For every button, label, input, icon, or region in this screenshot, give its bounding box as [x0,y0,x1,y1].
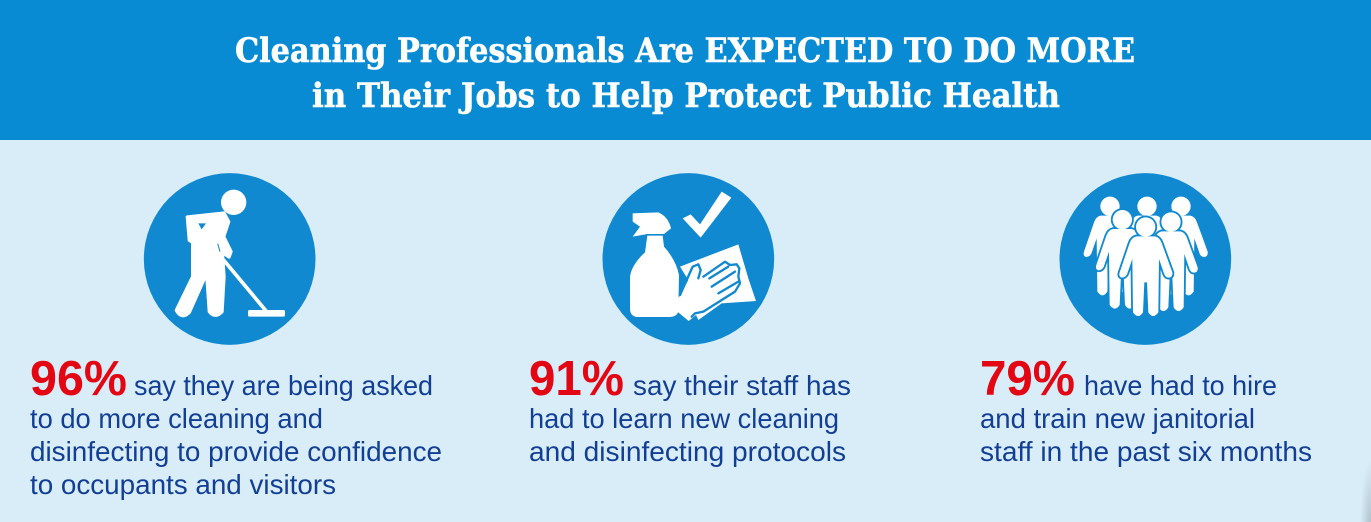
title [235,31,1135,116]
statistic text: say they are being asked [134,370,433,401]
statistic text [980,352,1312,467]
icon: person mopping [144,173,315,345]
icon: group of people [1059,173,1231,345]
statistic text [30,352,442,500]
statistic text: staff in the past six months [980,436,1312,467]
statistic text: say their staff has [633,370,851,401]
title: Cleaning Professionals Are EXPECTED TO DO MORE [235,31,1135,71]
statistic text: and disinfecting protocols [529,436,846,467]
panel: 79% hire and train [980,173,1312,467]
statistic text: to do more cleaning and [30,403,323,434]
statistic text: 96% [30,352,127,406]
statistic text [529,352,851,467]
panel: 96% cleaning more [30,173,442,500]
header banner [0,0,1371,140]
statistic text: to occupants and visitors [30,469,336,500]
statistic text: have had to hire [1084,370,1277,401]
statistic text: and train new janitorial [980,403,1255,434]
title: in Their Jobs to Help Protect Public Health [312,76,1060,116]
statistic text: had to learn new cleaning [529,403,839,434]
statistic text: 91% [529,352,624,406]
statistic text: disinfecting to provide confidence [30,436,442,467]
panel: 91% new protocols [529,173,851,467]
icon: spray bottle, cloth and check [602,173,774,345]
statistic text: 79% [980,352,1075,406]
